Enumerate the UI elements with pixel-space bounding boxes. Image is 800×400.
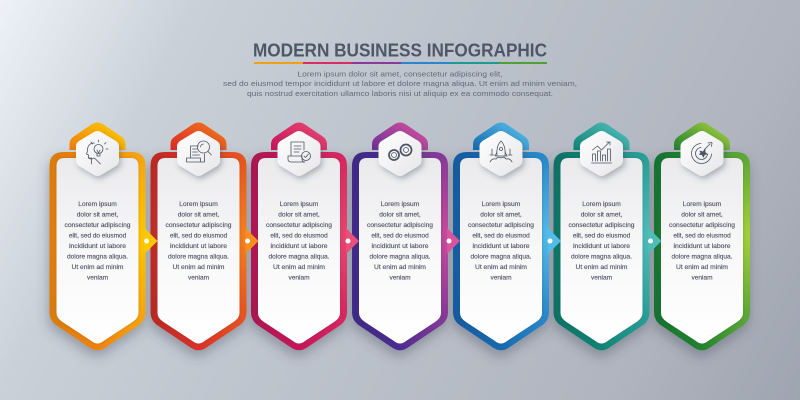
text block: Ut enim ad minim: [374, 264, 426, 271]
back hexagon tab: [574, 122, 630, 150]
text block: elit, sed do eiusmod: [371, 232, 429, 239]
card frame: [352, 152, 448, 350]
card frame: [554, 152, 650, 350]
text block: Lorem ipsum: [179, 201, 218, 208]
card frame: [453, 152, 549, 350]
card interior: [258, 158, 340, 344]
text block: elit, sed do eiusmod: [270, 232, 328, 239]
card interior: [560, 158, 642, 344]
text block: dolore magna aliqua.: [672, 253, 733, 260]
text block: dolore magna aliqua.: [571, 253, 632, 260]
back hexagon tab: [473, 122, 529, 150]
panel: step 5 (blue, rocket): [453, 122, 561, 350]
text block: veniam: [188, 274, 209, 281]
text block: [669, 201, 735, 281]
text block: dolor sit amet,: [581, 212, 622, 218]
text block: Lorem ipsum: [482, 201, 520, 208]
connector arrow with dot: [346, 228, 359, 254]
text block: consectetur adipiscing: [266, 222, 332, 229]
text block: elit, sed do eiusmod: [472, 232, 530, 239]
icon: magnifier over document: [186, 141, 212, 162]
text block: consectetur adipiscing: [468, 222, 534, 229]
text block: consectetur adipiscing: [568, 222, 635, 229]
text block: Ut enim ad minim: [475, 264, 527, 271]
text block: consectetur adipiscing: [669, 222, 735, 229]
text block: consectetur adipiscing: [64, 222, 131, 229]
card interior: [158, 158, 240, 344]
panel: step 7 (green, target): [654, 122, 750, 350]
back hexagon tab: [70, 122, 126, 150]
icon: two gears: [389, 144, 412, 160]
text block: [568, 201, 635, 281]
icon: document with check mark: [288, 142, 310, 162]
card interior: [460, 158, 542, 344]
white hexagon badge: [378, 131, 422, 176]
text block: incididunt ut labore: [472, 243, 530, 250]
back hexagon tab: [372, 122, 428, 150]
card frame: [150, 152, 246, 350]
text block: Ut enim ad minim: [676, 264, 728, 271]
text block: consectetur adipiscing: [367, 222, 433, 229]
icon: target with arrow: [692, 142, 712, 163]
text block: incididunt ut labore: [69, 243, 126, 250]
panel: step 6 (teal, growth chart): [554, 122, 662, 350]
icon: rocket launch: [490, 141, 512, 162]
card interior: [661, 158, 743, 344]
connector arrow with dot: [548, 228, 561, 254]
card interior: [359, 158, 441, 344]
text block: veniam: [87, 274, 108, 281]
text block: Lorem ipsum: [683, 201, 721, 208]
title underline: six colour segments: [254, 62, 547, 64]
back hexagon tab: [170, 122, 226, 150]
text block: elit, sed do eiusmod: [573, 232, 631, 239]
icon: head with light bulb: [86, 140, 108, 164]
text block: dolor sit amet,: [77, 212, 118, 218]
connector arrow with dot: [144, 228, 158, 254]
title: MODERN BUSINESS INFOGRAPHIC: [253, 40, 547, 60]
text block: dolor sit amet,: [379, 212, 421, 218]
intro text block: quis nostrud exercitation ullamco laboris nisi ut aliquip ex ea commodo consequat.: [247, 89, 553, 98]
white hexagon badge: [278, 131, 320, 176]
text block: dolore magna aliqua.: [168, 253, 229, 260]
intro text block: [223, 70, 577, 98]
icon: bar chart with rising arrow: [592, 142, 612, 163]
connector arrow with dot: [446, 228, 460, 254]
text block: Ut enim ad minim: [273, 264, 325, 271]
text block: incididunt ut labore: [270, 243, 328, 250]
text block: Lorem ipsum: [78, 201, 117, 208]
text block: dolor sit amet,: [681, 212, 723, 218]
text block: Lorem ipsum: [280, 201, 318, 208]
white hexagon badge: [76, 131, 119, 176]
white hexagon badge: [680, 131, 724, 176]
panel: step 3 (crimson, document check): [251, 122, 359, 350]
back hexagon tab: [674, 122, 730, 150]
text block: veniam: [288, 274, 310, 281]
text block: incididunt ut labore: [674, 243, 731, 250]
white hexagon badge: [177, 131, 220, 176]
text block: dolore magna aliqua.: [470, 253, 532, 260]
text block: dolor sit amet,: [178, 212, 219, 218]
panel: step 2 (red, magnifier on document): [150, 122, 258, 350]
text block: elit, sed do eiusmod: [69, 232, 127, 239]
text block: veniam: [691, 274, 713, 281]
text block: veniam: [591, 274, 612, 281]
card frame: [654, 152, 750, 350]
text block: Ut enim ad minim: [72, 264, 124, 271]
connector arrow with dot: [648, 228, 662, 254]
text block: dolore magna aliqua.: [67, 253, 128, 260]
text block: dolor sit amet,: [278, 212, 320, 218]
text block: Ut enim ad minim: [576, 264, 628, 271]
panel: step 4 (purple, gears): [352, 122, 460, 350]
text block: incididunt ut labore: [372, 243, 429, 250]
text block: incididunt ut labore: [573, 243, 630, 250]
text block: dolore magna aliqua.: [268, 253, 330, 260]
text block: veniam: [490, 274, 512, 281]
text block: [367, 201, 433, 281]
white hexagon badge: [580, 131, 623, 176]
intro text block: Lorem ipsum dolor sit amet, consectetur adipiscing elit,: [298, 70, 502, 78]
text block: incididunt ut labore: [170, 243, 227, 250]
text block: [166, 201, 232, 281]
text block: [468, 201, 534, 281]
text block: veniam: [389, 274, 411, 281]
text block: consectetur adipiscing: [166, 222, 232, 229]
text block: [64, 201, 131, 281]
intro text block: sed do eiusmod tempor incididunt ut labore et dolore magna aliqua. Ut enim ad minim veniam,: [223, 79, 577, 88]
text block: [266, 201, 332, 281]
text block: elit, sed do eiusmod: [673, 232, 731, 239]
card frame: [251, 152, 347, 350]
text block: elit, sed do eiusmod: [170, 232, 228, 239]
card frame: [50, 152, 146, 350]
text block: dolor sit amet,: [480, 212, 522, 218]
text block: Lorem ipsum: [381, 201, 419, 208]
connector arrow with dot: [245, 228, 258, 254]
white hexagon badge: [480, 131, 522, 176]
card interior: [56, 158, 138, 344]
panel: step 1 (orange, idea head): [50, 122, 158, 350]
text block: Lorem ipsum: [582, 201, 621, 208]
text block: dolore magna aliqua.: [370, 253, 431, 260]
back hexagon tab: [271, 122, 327, 150]
text block: Ut enim ad minim: [172, 264, 224, 271]
